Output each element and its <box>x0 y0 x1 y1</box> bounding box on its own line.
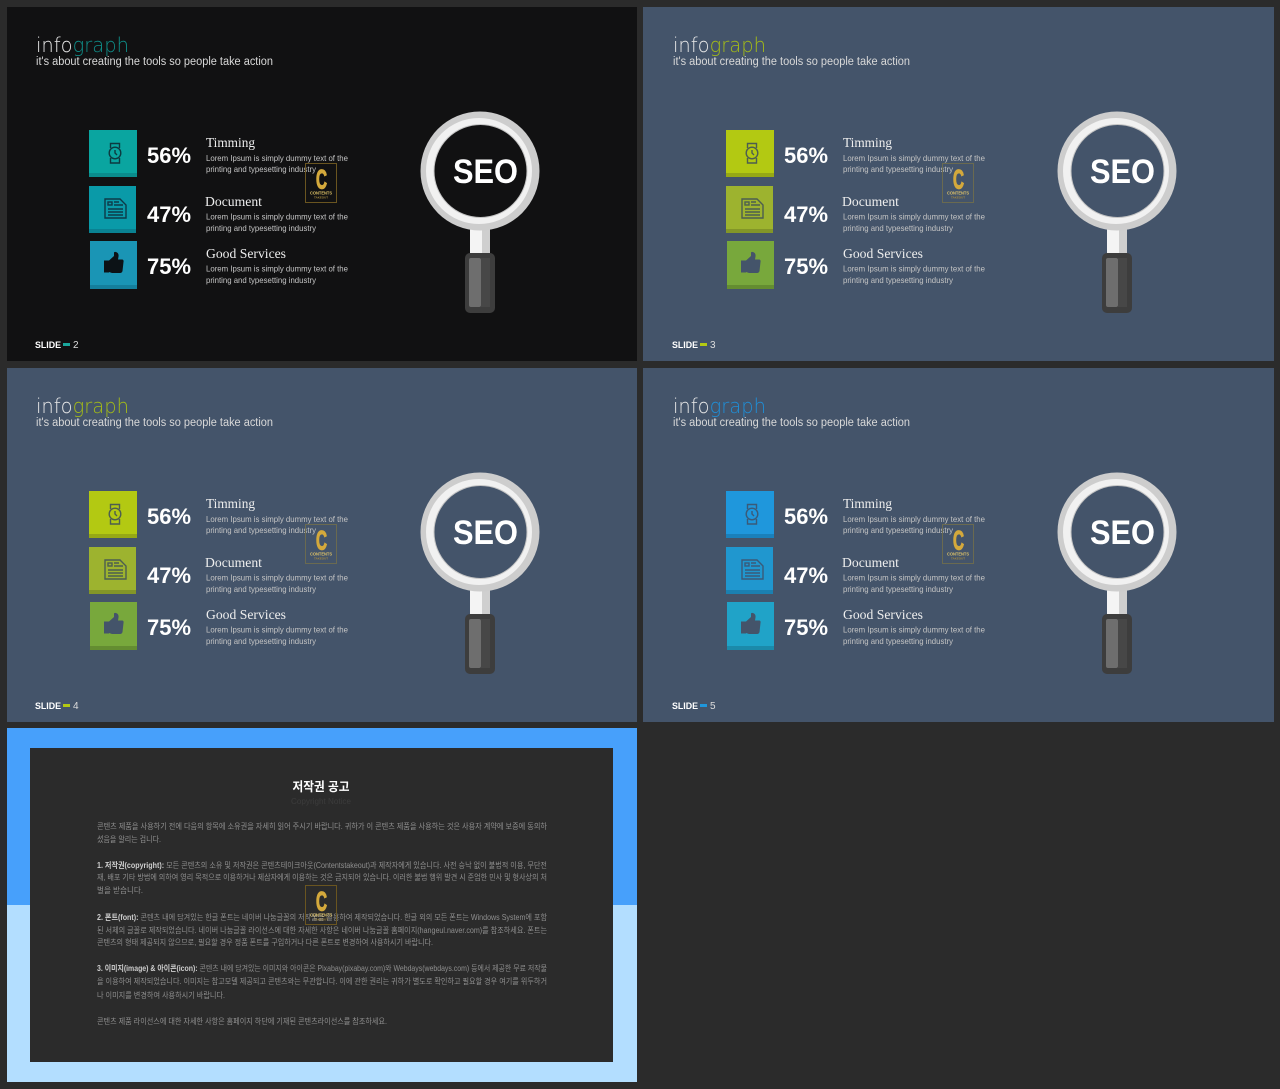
icon: thumbs up tile <box>727 241 774 289</box>
watermark: CONTENTS <box>947 190 969 196</box>
watermark: C <box>316 526 327 556</box>
description document: Lorem Ipsum is simply dummy text of the <box>206 572 348 582</box>
watermark <box>942 164 974 202</box>
panel: copyright notice <box>7 728 637 1082</box>
watermark <box>306 164 336 202</box>
watermark: C <box>953 526 964 556</box>
description good services <box>206 624 348 646</box>
percent 47: 47% <box>147 563 191 588</box>
percent 47: 47% <box>784 202 828 227</box>
slide number: 4 <box>73 701 79 712</box>
description good services: Lorem Ipsum is simply dummy text of the <box>843 264 985 274</box>
paragraph: intro: 콘텐츠 제품을 사용하기 전에 다음의 항목에 소유권을 자세히 읽어 주시기 바랍니다. 귀하가 이 콘텐츠 제품을 사용하는 것은 사용자 계약에 보증에 동의하 <box>97 821 548 831</box>
icon: document tile <box>89 547 136 594</box>
paragraph: copyright <box>97 860 547 895</box>
title: infograph <box>673 394 766 418</box>
slide number <box>672 701 716 712</box>
description good services <box>843 624 985 646</box>
heading document: Document <box>205 194 262 209</box>
panel: slide 3 slate lime <box>643 7 1274 361</box>
slide number: SLIDE <box>35 340 61 350</box>
subtitle: it's about creating the tools so people take action <box>36 417 273 429</box>
watermark: CONTENTS <box>310 552 332 556</box>
percent 56: 56% <box>147 504 191 529</box>
paragraph: copyright: 1. 저작권(copyright): 모든 콘텐츠의 소유 및 저작권은 콘텐츠테이크아웃(Contentstakeout)과 제작자에게 있습니다. 사전 승낙 없이 불법적 이용, 무단전 <box>97 860 547 870</box>
paragraph: font: 된 서체의 글꼴로 제작되었습니다. 네이버 나눔글꼴 라이선스에 대한 자세한 사항은 네이버 나눔글꼴 홈페이지(hangeul.naver.com)를 참조하세요. 폰트는 <box>97 925 547 935</box>
paragraph: intro <box>97 821 548 844</box>
watermark: TAKEOUT <box>314 918 328 922</box>
description timming <box>206 153 348 174</box>
description timming: printing and typesetting industry <box>206 164 317 174</box>
description timming <box>843 514 985 535</box>
watermark: TAKEOUT <box>314 556 328 560</box>
panel: slide 4 slate lime <box>7 368 637 722</box>
paragraph: font: 콘텐츠의 형태 제공되지 않으므로, 필요할 경우 정품 폰트를 구입하거나 다른 폰트로 변경하여 사용하시기 바랍니다. <box>97 937 433 947</box>
paragraph: copyright: 벌을 받습니다. <box>97 885 143 895</box>
magnifier SEO <box>1058 112 1176 313</box>
description document: Lorem Ipsum is simply dummy text of the <box>206 212 348 222</box>
percent 75: 75% <box>147 254 191 279</box>
description good services: printing and typesetting industry <box>843 275 954 285</box>
panel: slide 2 black teal <box>7 7 637 361</box>
percent 75: 75% <box>784 615 828 640</box>
magnifier SEO <box>420 112 540 313</box>
heading timming: Timming <box>206 135 255 150</box>
heading timming: Timming <box>843 496 892 511</box>
heading good services: Good Services <box>843 607 923 622</box>
icon: watch tile <box>89 130 137 177</box>
percent 75: 75% <box>784 254 828 279</box>
description good services: printing and typesetting industry <box>206 636 317 646</box>
description good services <box>843 264 985 285</box>
slide number <box>35 701 79 712</box>
heading document: Document <box>205 555 262 570</box>
icon: thumbs up tile <box>90 602 137 650</box>
percent 56: 56% <box>784 143 828 168</box>
heading good services: Good Services <box>206 246 286 261</box>
subtitle: it's about creating the tools so people take action <box>673 417 910 429</box>
slide number: 3 <box>710 340 716 351</box>
heading: copyright notice: 저작권 공고 <box>292 779 350 794</box>
heading timming: Timming <box>206 496 255 511</box>
watermark: CONTENTS <box>947 552 969 556</box>
watermark: C <box>953 164 964 194</box>
icon: document tile <box>89 186 136 233</box>
description document: printing and typesetting industry <box>206 584 317 594</box>
icon: thumbs up tile <box>90 241 137 289</box>
description timming: printing and typesetting industry <box>206 525 317 535</box>
slide number: SLIDE <box>672 340 698 350</box>
subtitle: it's about creating the tools so people take action <box>673 56 910 68</box>
paragraph: intro: 셨음을 알리는 겁니다. <box>97 834 161 844</box>
paragraph: font: 2. 폰트(font): 콘텐츠 내에 담겨있는 한글 폰트는 네이버 나눔글꼴의 저작물을 활용하여 제작되었습니다. 한글 외의 모든 폰트는 Windows System에 포함 <box>97 912 548 922</box>
percent 47: 47% <box>147 202 191 227</box>
subheading: Copyright Notice <box>291 797 352 806</box>
description good services: Lorem Ipsum is simply dummy text of the <box>843 624 985 634</box>
heading good services: Good Services <box>206 607 286 622</box>
description document: Lorem Ipsum is simply dummy text of the <box>843 572 985 582</box>
paragraph: copyright: 재, 배포 기타 방법에 의하여 영리 목적으로 이용하거나 제삼자에게 이용하는 것은 금지되어 있습니다. 이러한 불법 행위 발견 시 준엄한 민사 및 형사상의 처 <box>97 872 547 882</box>
description good services: Lorem Ipsum is simply dummy text of the <box>206 264 348 274</box>
watermark: C <box>316 886 327 916</box>
slide number: SLIDE <box>672 701 698 711</box>
percent 56: 56% <box>784 504 828 529</box>
description good services <box>206 264 348 285</box>
heading document: Document <box>842 555 899 570</box>
watermark <box>942 524 974 564</box>
watermark: TAKEOUT <box>314 196 328 200</box>
paragraph: font <box>97 912 548 947</box>
description document: printing and typesetting industry <box>843 223 954 233</box>
slide number <box>672 340 716 351</box>
watermark: CONTENTS <box>310 912 332 918</box>
description timming: Lorem Ipsum is simply dummy text of the <box>843 514 985 524</box>
description timming <box>206 514 348 535</box>
description document <box>206 572 348 594</box>
icon: watch tile <box>726 130 774 177</box>
description document: Lorem Ipsum is simply dummy text of the <box>843 212 985 222</box>
description document <box>206 212 348 233</box>
heading good services: Good Services <box>843 246 923 261</box>
description document: printing and typesetting industry <box>206 223 317 233</box>
magnifier SEO: SEO <box>453 514 518 552</box>
paragraph: license: 콘텐츠 제품 라이선스에 대한 자세한 사항은 홈페이지 하단에 기재된 콘텐츠라이선스를 참조하세요. <box>97 1016 387 1026</box>
icon: watch tile <box>726 491 774 538</box>
heading timming: Timming <box>843 135 892 150</box>
title: infograph <box>36 394 129 418</box>
percent 75: 75% <box>147 615 191 640</box>
watermark <box>306 524 336 564</box>
description timming: printing and typesetting industry <box>843 164 954 174</box>
paragraph: images: 을 이용하여 제작되었습니다. 이미지는 참고모델 제공되고 콘텐츠와는 무관합니다. 이에 관한 권리는 귀하가 별도로 확인하고 필요할 경우 여기를 위두하거 <box>97 976 547 986</box>
watermark: TAKEOUT <box>951 196 965 200</box>
percent 56: 56% <box>147 143 191 168</box>
slide number: SLIDE <box>35 701 61 711</box>
icon: document tile <box>726 547 773 594</box>
watermark: C <box>316 164 327 194</box>
description document <box>843 572 985 594</box>
title: infograph <box>36 33 129 57</box>
watermark: TAKEOUT <box>951 556 965 560</box>
heading document: Document <box>842 194 899 209</box>
description timming: Lorem Ipsum is simply dummy text of the <box>843 153 985 163</box>
watermark <box>306 886 336 924</box>
slide number: 5 <box>710 701 716 712</box>
watermark: CONTENTS <box>310 190 332 196</box>
magnifier SEO: SEO <box>1090 514 1155 552</box>
description document <box>843 212 985 233</box>
description good services: printing and typesetting industry <box>843 636 954 646</box>
slide number: 2 <box>73 340 79 351</box>
icon: thumbs up tile <box>727 602 774 650</box>
magnifier SEO: SEO <box>453 153 518 191</box>
magnifier SEO <box>1058 472 1176 674</box>
paragraph: images <box>97 963 547 1000</box>
magnifier SEO: SEO <box>1090 153 1155 191</box>
description timming: Lorem Ipsum is simply dummy text of the <box>206 153 348 163</box>
description good services: printing and typesetting industry <box>206 275 317 285</box>
magnifier SEO <box>420 472 540 674</box>
title: infograph <box>673 33 766 57</box>
description timming <box>843 153 985 174</box>
percent 47: 47% <box>784 563 828 588</box>
description good services: Lorem Ipsum is simply dummy text of the <box>206 624 348 634</box>
panel: slide 5 slate blue <box>643 368 1274 722</box>
subtitle: it's about creating the tools so people take action <box>36 56 273 68</box>
description document: printing and typesetting industry <box>843 584 954 594</box>
description timming: Lorem Ipsum is simply dummy text of the <box>206 514 348 524</box>
icon: document tile <box>726 186 773 233</box>
description timming: printing and typesetting industry <box>843 525 954 535</box>
paragraph: images: 나 이미지를 변경하여 사용하시기 바랍니다. <box>97 990 225 1000</box>
paragraph: images: 3. 이미지(image) & 아이콘(icon): 콘텐츠 내에 담겨있는 이미지와 아이콘은 Pixabay(pixabay.com)와 Webdays(webdays.com) 등에서 제공한 무료 저작물 <box>97 963 547 973</box>
slide number <box>35 340 79 351</box>
icon: watch tile <box>89 491 137 538</box>
